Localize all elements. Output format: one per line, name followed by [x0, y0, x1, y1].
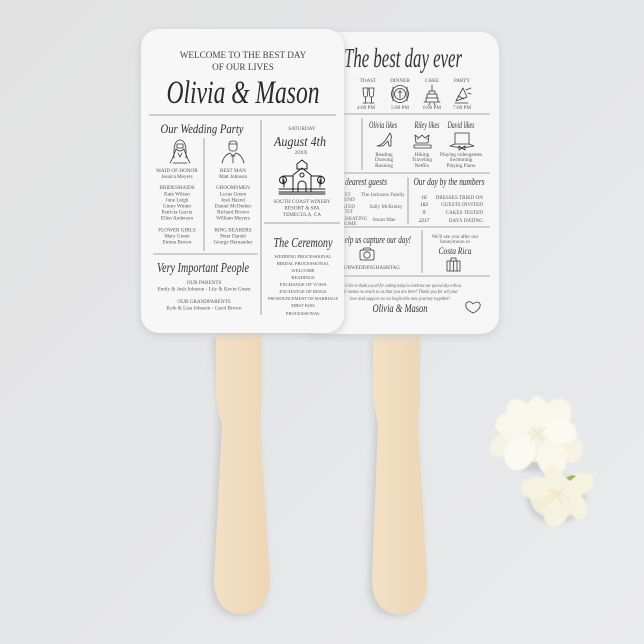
dearest guests: Sally McKinley [370, 204, 403, 210]
icon: party hat [455, 88, 471, 103]
panel: the ceremony: WEDDING PROCESSIONAL [274, 254, 332, 259]
icon: winery building [279, 160, 325, 194]
timeline labels: 5:00 PM [391, 105, 409, 111]
our day by the numbers: DRESSES TRIED ON [436, 195, 483, 201]
welcome heading: WELCOME TO THE BEST DAY [180, 50, 307, 60]
panel: the ceremony: WELCOME [291, 268, 315, 273]
timeline labels: 7:00 PM [453, 105, 471, 111]
icon: heart [466, 302, 480, 313]
our day by the numbers: Our day by the numbers [414, 177, 485, 188]
dearest guests: RELATED [332, 204, 355, 210]
panel: our wedding party [156, 122, 253, 246]
our day by the numbers: GUESTS INVITED [441, 202, 483, 208]
panel: the ceremony: EXCHANGE OF VOWS [280, 282, 327, 287]
our day by the numbers [414, 177, 485, 224]
panel: the ceremony: The Ceremony [274, 236, 333, 251]
panel: date and venue [273, 126, 331, 218]
decoration: white flowers [486, 394, 598, 530]
thank you message: It means so much to us that you are here! Thank you for all your [343, 288, 459, 295]
panel: our wedding party: Lucas Green [220, 192, 247, 198]
likes section: Traveling [412, 157, 432, 163]
divider lines [300, 114, 490, 276]
panel: very important people: Kyle & Lisa Johnson - Carol Brown [166, 306, 242, 312]
panel: our wedding party: Daniel McOmber [215, 204, 251, 210]
panel: our wedding party: Peter Daniel [220, 234, 246, 240]
hashtag section: help us capture our day! [341, 235, 411, 246]
couple names: Olivia & Mason [166, 75, 320, 111]
panel: our wedding party: BRIDESMAIDS [159, 185, 195, 191]
timeline labels: DINNER [390, 78, 410, 84]
panel: date and venue: SATURDAY [288, 126, 316, 132]
divider lines [149, 115, 340, 315]
likes section: Playing videogames [440, 152, 482, 158]
honeymoon section: honeymoon in [440, 239, 470, 245]
panel: the ceremony [268, 236, 338, 316]
icon: groom [222, 141, 244, 163]
left fan handle [211, 333, 270, 616]
dearest guests: CELEBRATING [332, 216, 368, 222]
welcome heading: OF OUR LIVES [212, 62, 274, 72]
icon: dinner plate [392, 86, 408, 102]
panel: very important people: OUR GRANDPARENTS [177, 299, 231, 305]
likes section: Swimming [450, 157, 473, 163]
panel: the ceremony: FIRST KISS [291, 303, 315, 308]
dearest guests: The Jacksons Family [361, 192, 405, 198]
panel: our wedding party: FLOWER GIRLS [158, 228, 196, 234]
likes section: Netflix [415, 162, 430, 169]
panel: our wedding party: Ginny Winter [163, 204, 191, 210]
panel: date and venue: SOUTH COAST WINERY [273, 199, 331, 205]
thank you message: love and support as we begin this new journey together! [350, 296, 451, 302]
panel: the ceremony: READINGS [291, 275, 315, 280]
likes section: Hiking [415, 152, 430, 158]
left fan card: welcome side [141, 29, 344, 335]
icon: bride [170, 140, 190, 163]
lower flower [520, 461, 598, 530]
panel: our wedding party: Emma Brown [163, 240, 192, 246]
panel: our wedding party: Ellen Anderson [161, 216, 193, 222]
timeline labels [357, 78, 471, 111]
panel: very important people: Very Important People [157, 260, 249, 275]
panel: our wedding party: Our Wedding Party [160, 122, 244, 136]
dearest guests: BEST [338, 192, 352, 198]
icon: suitcase [447, 258, 460, 271]
our day by the numbers: DAYS DATING [449, 218, 483, 224]
likes section: Reading [375, 152, 393, 158]
panel: date and venue: 20XX [295, 150, 308, 156]
dearest guests: FRIEND [336, 197, 355, 203]
honeymoon section: Costa Rica [438, 247, 472, 257]
our day by the numbers: 163 [420, 202, 428, 208]
panel: date and venue: TEMECULA, CA [283, 212, 321, 218]
panel: our wedding party: MAID OF HONOR [156, 168, 198, 174]
panel: the ceremony: PROCESSIONAL [286, 311, 320, 316]
hashtag section: #OURWEDDINGHASHTAG [338, 265, 400, 271]
upper flower [486, 394, 588, 478]
panel: our wedding party: Jessica Meyers [161, 174, 193, 180]
icon: camera [360, 248, 374, 260]
hashtag section [338, 235, 411, 271]
likes section: Playing Piano [447, 163, 476, 169]
panel: date and venue: August 4th [273, 135, 326, 150]
dearest guests: BAPTIST [332, 209, 354, 215]
honeymoon section: We'll see you after our [432, 233, 479, 240]
panel: our wedding party: RING BEARERS [214, 228, 252, 234]
our day by the numbers: CAKES TESTED [445, 210, 483, 216]
panel: our wedding party: Kate Wilson [164, 192, 190, 198]
dearest guests [332, 177, 405, 227]
panel: the ceremony: EXCHANGE OF RINGS [279, 289, 327, 294]
panel: very important people [157, 260, 251, 312]
thank you message [340, 282, 462, 302]
panel: very important people: OUR PARENTS [187, 280, 222, 286]
panel: our wedding party: Mary Green [164, 234, 190, 240]
dearest guests: Stuart Mae [373, 217, 396, 223]
likes section [369, 120, 482, 169]
timeline labels: 4:00 PM [357, 105, 375, 111]
likes section: Olivia likes [369, 120, 397, 130]
panel: our wedding party: William Meyers [216, 216, 250, 222]
thank you message: We'd like to thank you all for coming today to celebrate our special day with us. [340, 282, 462, 289]
signature: Olivia & Mason [372, 303, 428, 315]
right fan handle [369, 333, 427, 616]
honeymoon section [432, 233, 479, 271]
dearest guests: dearest guests [345, 177, 387, 188]
panel: our wedding party: GROOMSMEN [216, 185, 250, 191]
dearest guests: AT HOME [334, 221, 357, 227]
our day by the numbers: 2217 [419, 218, 430, 224]
panel: date and venue: RESORT & SPA [284, 206, 320, 212]
likes section: Running [375, 163, 393, 169]
timeline labels: PARTY [454, 78, 470, 84]
likes section: Drawing [375, 157, 393, 163]
panel: our wedding party: Josh Hazrel [221, 198, 246, 204]
likes section: Riley likes [414, 120, 440, 130]
panel: the ceremony: PRONOUNCEMENT OF MARRIAGE [268, 296, 338, 301]
icon: high heel [377, 133, 391, 146]
right fan card: schedule side [300, 32, 499, 337]
panel: our wedding party: Richard Brown [217, 210, 249, 216]
icon: crown [414, 135, 431, 148]
timeline labels: CAKE [425, 78, 439, 84]
icon: top hat and bow tie [450, 133, 474, 150]
timeline labels: 6:00 PM [423, 105, 441, 111]
icon: tiered cake [424, 85, 440, 105]
panel: our wedding party: June Leigh [166, 198, 189, 204]
panel: our wedding party: Patricia Garcia [162, 210, 193, 216]
panel: the ceremony: BRIDAL PROCESSIONAL [277, 261, 329, 266]
panel: our wedding party: BEST MAN [220, 168, 246, 174]
timeline labels: TOAST [360, 78, 377, 84]
our day by the numbers: 9 [423, 210, 426, 216]
welcome heading [180, 50, 307, 72]
heading: the best day ever: The best day ever [344, 43, 462, 73]
panel: very important people: Emily & Josh Johnson - Lily & Kevin Green [157, 286, 251, 292]
likes section: David likes [447, 120, 475, 130]
our day by the numbers: 16 [421, 195, 427, 201]
panel: our wedding party: George Hernandez [214, 240, 253, 246]
panel: our wedding party: Matt Johnson [219, 174, 247, 180]
icon: champagne glasses [363, 88, 374, 103]
